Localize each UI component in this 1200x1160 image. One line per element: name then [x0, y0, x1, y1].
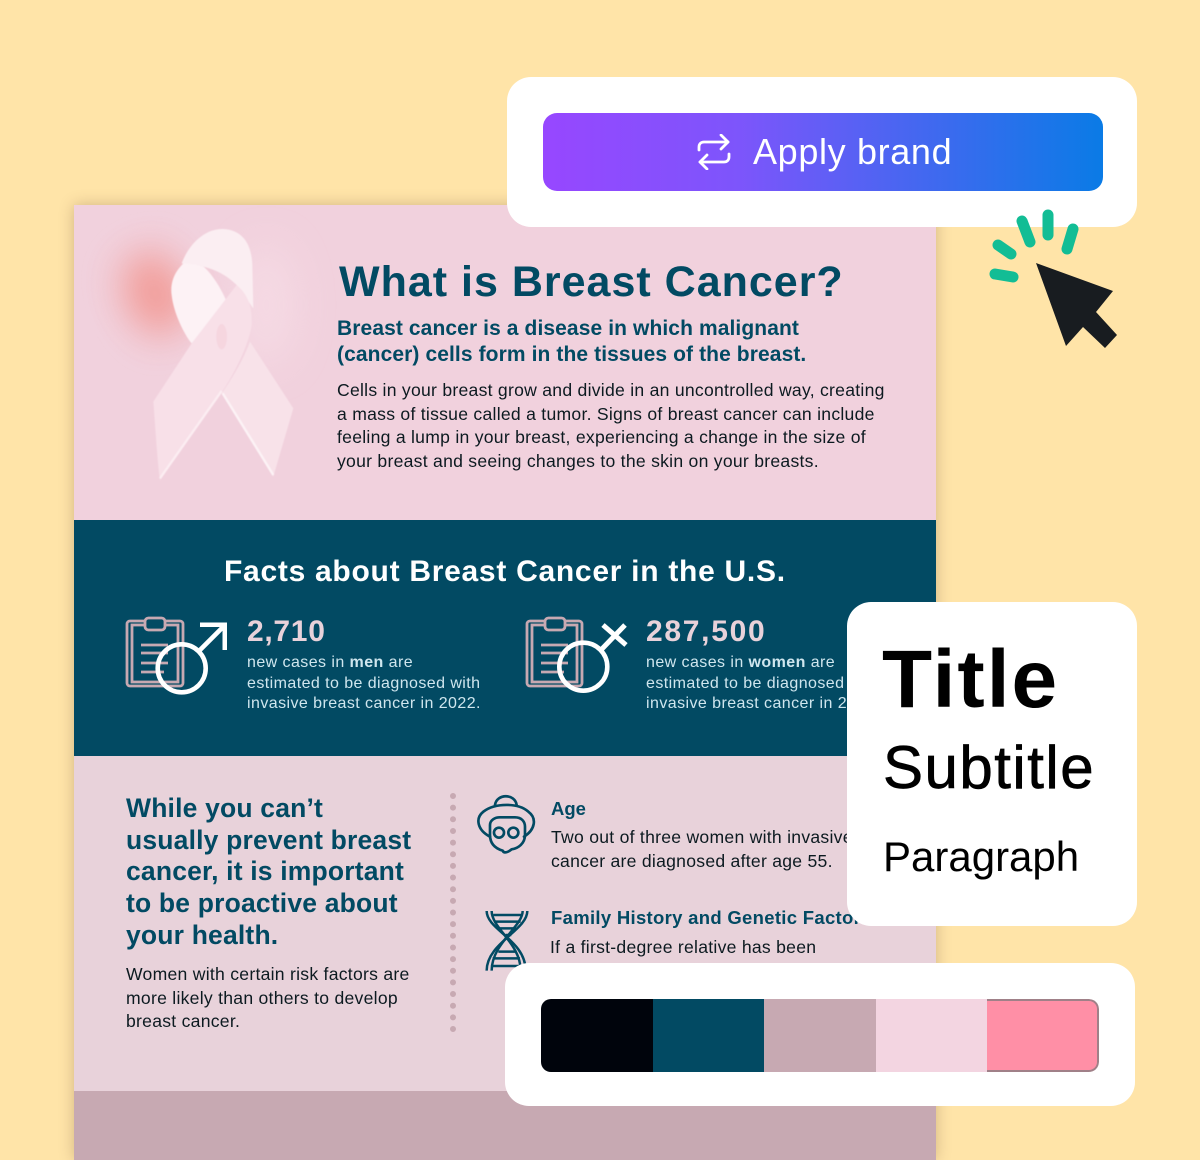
risk heading: While you can’t: [126, 793, 323, 823]
risk heading: to be proactive about: [126, 888, 398, 918]
right tail: [222, 342, 293, 477]
icon: click sparks: [990, 210, 1078, 282]
icon: elderly woman: [477, 794, 536, 854]
risk description: Women with certain risk factors are: [126, 964, 410, 984]
icon: cursor: [1036, 263, 1117, 348]
risk description: breast cancer.: [126, 1011, 240, 1031]
stat text: men: new cases in men are: [247, 654, 413, 671]
risk text: age: cancer are diagnosed after age 55.: [551, 851, 833, 871]
icon: clipboard male: [126, 616, 227, 695]
sample title: Title: [882, 634, 1059, 725]
button: apply brand: [543, 113, 1103, 191]
description: feeling a lump in your breast, experiencing a change in the size of: [337, 427, 866, 447]
title: What is Breast Cancer?: [339, 258, 844, 306]
icon: clipboard female: [526, 616, 628, 693]
panel: hero: [74, 205, 936, 520]
infographic page: [74, 205, 936, 1160]
risk text: age: Two out of three women with invasive breast: [551, 827, 908, 847]
button label: Apply brand: [753, 131, 952, 172]
description: your breast and seeing changes to the skin on your breasts.: [337, 451, 819, 471]
stat text: men: invasive breast cancer in 2022.: [247, 695, 481, 712]
stat text: women: invasive breast cancer in 2022.: [646, 695, 880, 712]
subtitle: [337, 317, 806, 366]
stat text: women: estimated to be diagnosed with: [646, 674, 880, 692]
stat text: women: [646, 654, 880, 712]
risk text: family history: If a first-degree relative has been: [550, 937, 816, 957]
risk heading: family history: Family History and Genetic Factors: [551, 907, 872, 928]
palette swatches: [541, 999, 1099, 1072]
risk heading: age: Age: [551, 798, 586, 819]
stat: women: 287,500: [646, 615, 766, 648]
risk text: age: [551, 827, 908, 871]
risk heading: your health.: [126, 920, 278, 950]
ribbon photo: [103, 228, 293, 479]
subtitle: Breast cancer is a disease in which malignant: [337, 317, 799, 340]
description: Cells in your breast grow and divide in an uncontrolled way, creating: [337, 380, 885, 400]
risk description: [126, 964, 410, 1031]
facts heading: Facts about Breast Cancer in the U.S.: [224, 555, 786, 588]
card: colour palette: [505, 963, 1135, 1106]
stat: men: 2,710: [247, 615, 326, 648]
back band: [182, 229, 253, 308]
card: apply brand: [507, 77, 1137, 227]
icon: swap arrows: [698, 134, 730, 170]
sample subtitle: Subtitle: [883, 734, 1095, 801]
risk heading: cancer, it is important: [126, 856, 404, 886]
dotted divider: [450, 793, 456, 1032]
risk heading: [126, 793, 411, 950]
panel: bottom band: [74, 1091, 936, 1160]
stat text: men: [247, 654, 481, 712]
card: typography: [847, 602, 1137, 926]
risk heading: usually prevent breast: [126, 825, 411, 855]
sample paragraph: Paragraph: [883, 833, 1079, 880]
panel: risk factors: [74, 756, 936, 1091]
icon: dna: [485, 911, 529, 971]
loop inner face: [171, 263, 227, 343]
stat text: women: new cases in women are: [646, 654, 835, 671]
description: a mass of tissue called a tumor. Signs of breast cancer can include: [337, 404, 875, 424]
panel: facts: [74, 520, 936, 756]
risk description: more likely than others to develop: [126, 988, 398, 1008]
description: [337, 380, 885, 471]
stat text: men: estimated to be diagnosed with: [247, 674, 480, 692]
subtitle: (cancer) cells form in the tissues of the breast.: [337, 343, 806, 366]
front band: [153, 285, 252, 480]
